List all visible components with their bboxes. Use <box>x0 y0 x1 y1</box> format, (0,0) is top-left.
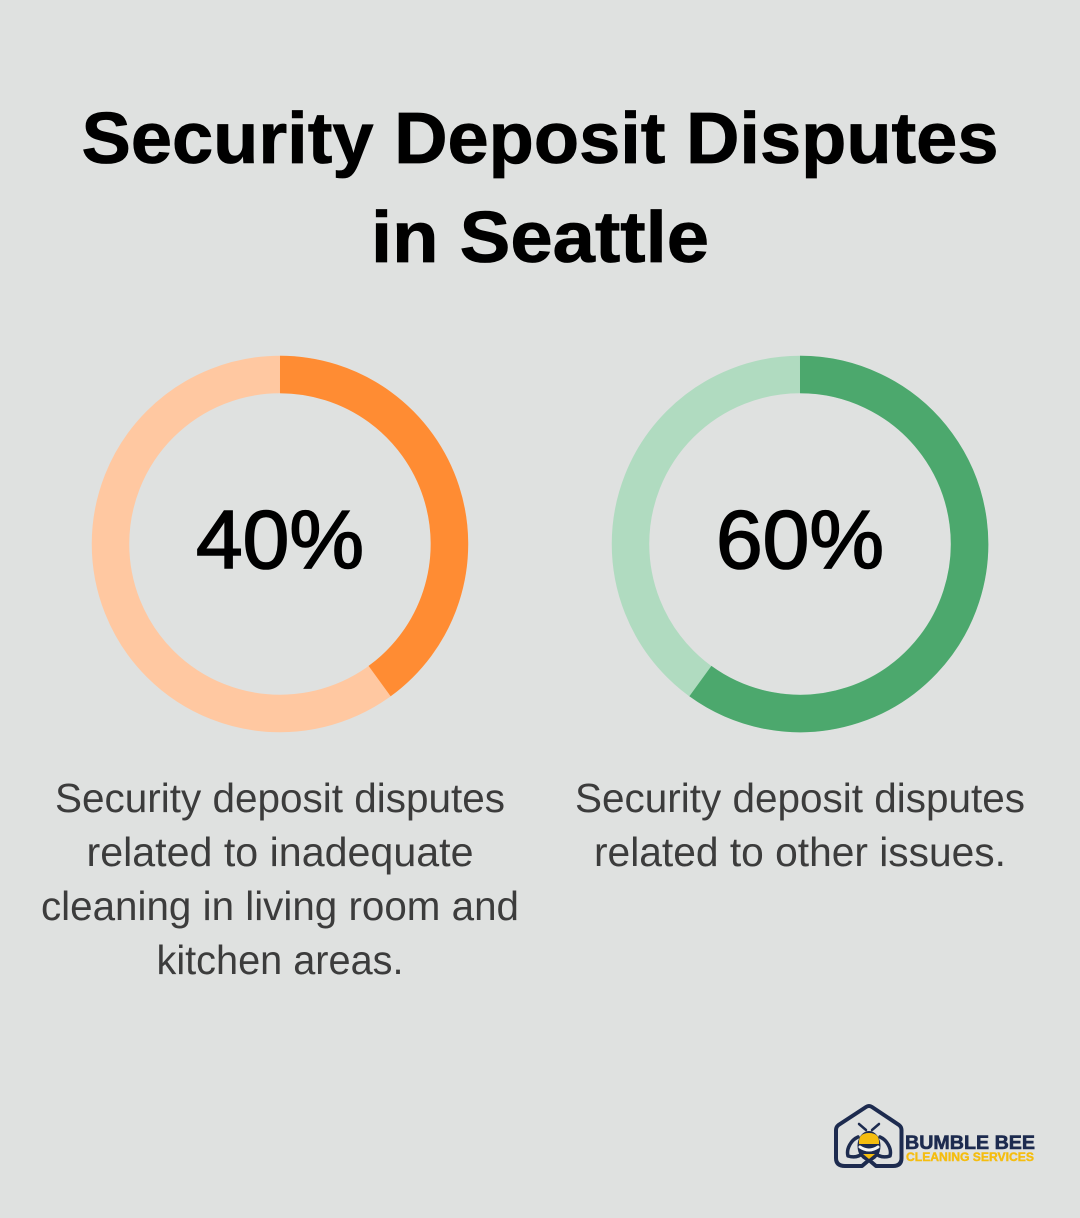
panel: 60 percent statistic <box>575 374 1025 875</box>
logo wordmark: BUMBLE BEE <box>905 1132 1035 1154</box>
title <box>82 99 998 278</box>
description: inadequate cleaning <box>41 775 519 983</box>
donut chart: 60 percent <box>630 374 970 714</box>
donut chart: 40 percent <box>110 374 450 714</box>
title: in Seattle <box>371 198 709 278</box>
description: inadequate cleaning: cleaning in living room and <box>41 883 519 929</box>
description: inadequate cleaning: related to inadequate <box>86 829 474 875</box>
value: 40%: 40% <box>196 493 364 586</box>
panel: 40 percent statistic <box>41 374 519 983</box>
description: other issues: Security deposit disputes <box>575 775 1025 821</box>
description: other issues: related to other issues. <box>594 829 1006 875</box>
value: 60%: 60% <box>716 493 884 586</box>
icon: house with bee <box>836 1106 902 1166</box>
description: other issues <box>575 775 1025 875</box>
description: inadequate cleaning: kitchen areas. <box>156 937 404 983</box>
logo tagline: CLEANING SERVICES <box>906 1152 1034 1164</box>
logo: Bumble Bee Cleaning Services <box>836 1106 1035 1166</box>
title: Security Deposit Disputes <box>82 99 998 179</box>
description: inadequate cleaning: Security deposit disputes <box>55 775 505 821</box>
